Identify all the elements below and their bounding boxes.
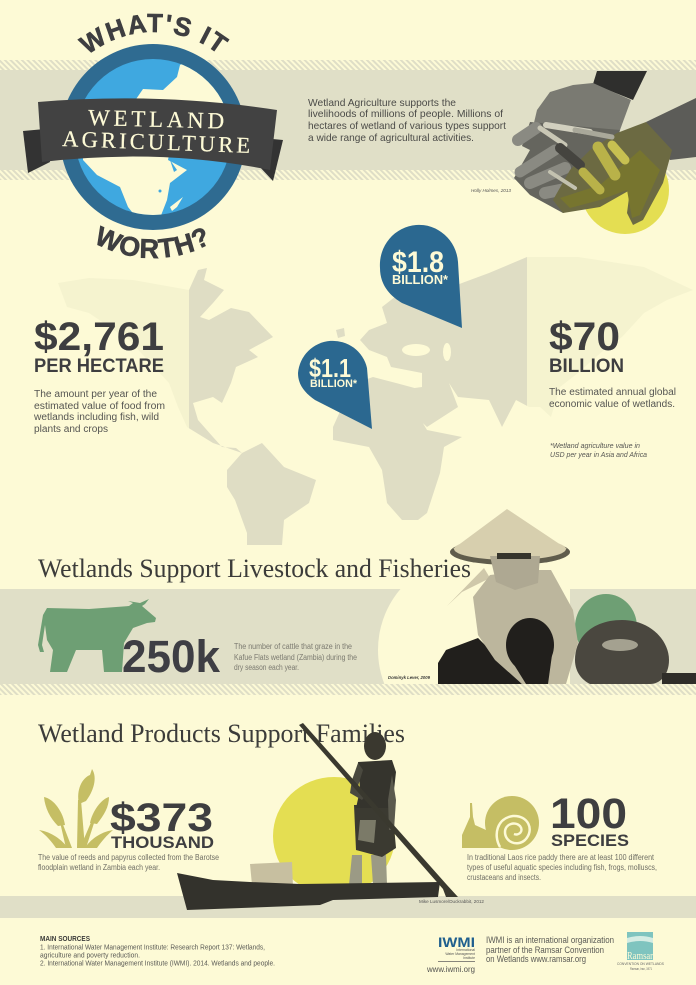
logo: IWMI: Institute: [463, 956, 475, 960]
lower hand: [553, 122, 672, 225]
text: about IWMI: [486, 935, 614, 964]
title text: worth: WORTH?: [97, 225, 206, 258]
photo: boy poling a canoe: [177, 723, 458, 910]
arm: [388, 775, 396, 830]
heading: products: Wetland Products Support Families: [38, 719, 405, 748]
footnote: USD per year in Asia and Africa: [550, 450, 647, 459]
logo: IWMI: www.iwmi.org: [426, 964, 475, 974]
text: about IWMI: partner of the Ramsar Convention: [486, 945, 604, 955]
intro text: a wide range of agricultural activities.: [308, 133, 474, 144]
bottom band: [0, 896, 696, 918]
map pin: 1.1 billion: $1.1: [309, 353, 351, 383]
bench: [662, 673, 696, 684]
stat: per hectare: [33, 315, 165, 435]
world map: [58, 257, 693, 545]
icon: snail: [462, 796, 539, 850]
text: cattle: dry season each year.: [234, 663, 299, 672]
stat: global value: economic value of wetlands.: [549, 399, 675, 410]
stat: per hectare: wetlands including fish, wild: [33, 412, 159, 423]
photo credit: hands: Holly Holmes, 2013: [471, 188, 511, 193]
ribbon text: [62, 105, 251, 158]
canoe: [177, 873, 440, 910]
text: about IWMI: on Wetlands www.ramsar.org: [486, 954, 586, 964]
main sources: 2. International Water Management Institute (IWMI). 2014. Wetlands and people.: [40, 960, 275, 968]
green circle: [575, 594, 637, 660]
mask: [490, 556, 540, 590]
text: species: In traditional Laos rice paddy there are at least 100 different: [467, 853, 655, 862]
heading: livestock and fisheries: Wetlands Support Livestock and Fisheries: [38, 554, 471, 583]
yellow circle behind hands: [581, 146, 669, 234]
torso: [356, 760, 396, 808]
ribbon text: AGRICULTURE: [62, 126, 251, 158]
fish in basket: [602, 639, 638, 651]
dark lap: [506, 618, 554, 672]
icon: cow: [38, 599, 156, 672]
main sources: MAIN SOURCES: [40, 936, 90, 943]
photo credit: woman: Dominyk Lever, 2009: [388, 675, 430, 681]
stat: 100 species: 100: [550, 790, 627, 838]
title badge: globe: [23, 14, 283, 258]
photo: woman in conical hat with basket: [438, 509, 696, 684]
intro text: hectares of wetland of various types support: [308, 121, 506, 132]
top band: [0, 60, 696, 180]
globe ocean and land: [78, 59, 226, 215]
stat: global value: [549, 315, 676, 410]
scarf tail: [447, 568, 490, 606]
stat: per hectare: $2,761: [34, 315, 164, 359]
palm tint: [560, 150, 660, 218]
stat: 373 thousand: [110, 796, 214, 852]
torso: [473, 570, 578, 684]
map pin: 1.1 billion: [298, 341, 372, 429]
map pin: 1.8 billion: BILLION*: [392, 273, 448, 287]
stat: 250k: 250k: [122, 631, 221, 682]
intro text: Wetland Agriculture supports the: [308, 98, 456, 109]
stat: 100 species: SPECIES: [551, 831, 629, 850]
text: reeds: floodplain wetland in Zambia each year.: [38, 863, 160, 872]
sack: [250, 862, 293, 887]
intro text: livelihoods of millions of people. Millions of: [308, 109, 503, 120]
main sources: 1. International Water Management Institute: Research Report 137: Wetlands,: [40, 944, 265, 952]
left fingers: [518, 128, 585, 193]
arm: [646, 98, 696, 160]
text: cattle: Kafue Flats wetland (Zambia) during the: [234, 653, 357, 662]
dark knees: [438, 638, 522, 684]
ribbon: [38, 98, 277, 170]
ribbon text: WETLAND: [88, 105, 224, 134]
footnote: [550, 441, 647, 459]
logo: Ramsar: CONVENTION ON WETLANDS: [617, 962, 664, 966]
stat: global value: BILLION: [549, 355, 624, 377]
photo: cupped hands with fish: [514, 71, 696, 225]
intro text: [308, 98, 506, 144]
footnote: *Wetland agriculture value in: [550, 441, 640, 450]
eyes shadow: [497, 553, 531, 559]
text: reeds: The value of reeds and papyrus collected from the Barotse: [38, 853, 219, 862]
text: species: crustaceans and insects.: [467, 873, 541, 882]
livestock band: [0, 589, 696, 695]
pole: [299, 723, 458, 897]
stat: per hectare: plants and crops: [34, 424, 108, 435]
map pin: 1.8 billion: $1.8: [392, 246, 444, 279]
icon: reeds: [39, 769, 113, 848]
stat: per hectare: estimated value of food from: [34, 401, 165, 412]
stat: per hectare: The amount per year of the: [34, 389, 157, 400]
text: species: [467, 853, 657, 882]
main sources: [40, 936, 275, 968]
fish: [540, 125, 625, 190]
logo: Ramsar: Ramsar: [627, 951, 654, 962]
legs: [349, 855, 362, 885]
logo: Ramsar: Ramsar, Iran, 1971: [630, 967, 652, 971]
title text: what's it: WHAT'S IT: [77, 14, 230, 53]
map pin: 1.1 billion: BILLION*: [310, 378, 358, 390]
upper hand: [533, 83, 631, 137]
text: cattle: The number of cattle that graze in the: [234, 642, 352, 651]
main sources: agriculture and poverty reduction.: [40, 952, 140, 960]
text: about IWMI: IWMI is an international organization: [486, 935, 614, 945]
text: cattle: [234, 642, 357, 672]
logo: IWMI: Water Management: [445, 952, 475, 956]
logo: IWMI: [426, 934, 475, 974]
globe ring: [60, 44, 246, 230]
hat: [450, 509, 570, 565]
head: [364, 732, 386, 760]
stat: per hectare: PER HECTARE: [34, 355, 164, 377]
yellow circle behind boy: [273, 777, 395, 895]
stat: global value: $70: [549, 315, 620, 359]
basket: [575, 620, 669, 684]
stat: global value: The estimated annual global: [549, 387, 676, 398]
sleeve: [593, 71, 647, 100]
map pin: 1.8 billion: [380, 225, 462, 328]
text: species: types of useful aquatic species including fish, frogs, molluscs,: [467, 863, 657, 872]
ribbon tails: [23, 129, 283, 181]
logo: IWMI: International: [456, 948, 475, 952]
shorts: [354, 805, 396, 857]
hand mass: [514, 122, 620, 213]
stat: 373 thousand: THOUSAND: [111, 833, 214, 852]
stat: 373 thousand: $373: [110, 796, 213, 840]
logo: IWMI: IWMI: [438, 934, 475, 950]
text: reeds: [38, 853, 219, 872]
thigh highlight: [358, 820, 376, 843]
logo: Ramsar: [617, 932, 664, 971]
photo credit: boy: Mike Lusmore/Duckrabbit, 2012: [419, 899, 484, 904]
